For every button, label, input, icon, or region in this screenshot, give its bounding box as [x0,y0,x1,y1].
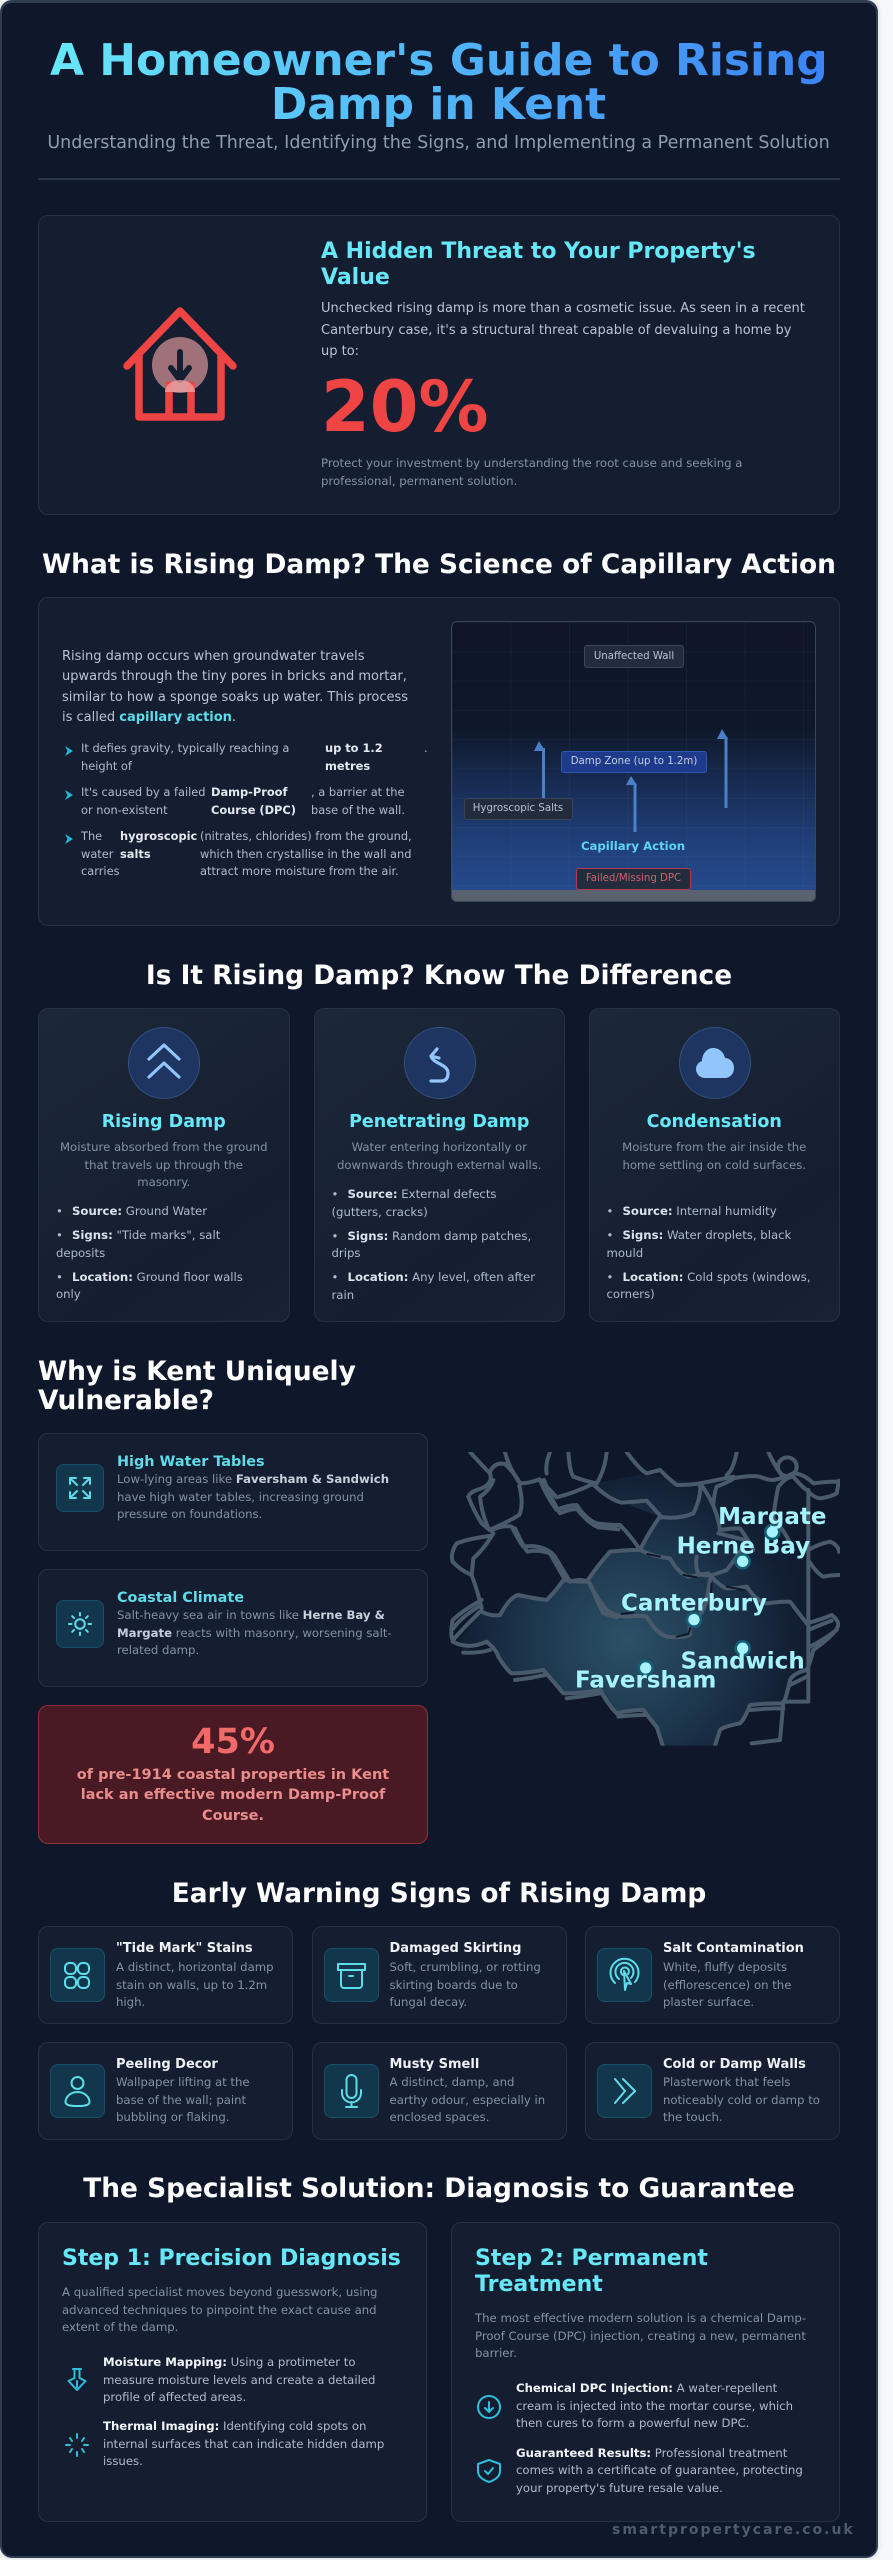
text: chemical DPC injection: Chemical DPC Injection: A water-repellent [516,2381,777,2395]
text: musty smell: earthy odour, especially in [390,2093,545,2107]
label: capillary action: Capillary Action [581,839,685,853]
text: protect investment: Protect your investment by understanding the root cause and seeking a [321,456,742,470]
text: high water tables: have high water tables, increasing ground [117,1490,364,1504]
panel: hidden threat [38,215,840,515]
text: high water tables [117,1472,389,1521]
heading: hidden threat [321,239,756,290]
text: thermal imaging: Thermal Imaging: Identifying cold spots on [103,2419,366,2433]
text: musty smell: enclosed spaces. [390,2110,489,2124]
text: coastal climate: Salt-heavy sea air in towns like Herne Bay & [117,1608,385,1622]
text: penetrating damp description: Water entering horizontally or [352,1140,527,1154]
list: condensation facts [606,1204,811,1301]
bullet: salts: water [81,847,113,861]
list: condensation facts: Location: Cold spots (windows, [622,1270,811,1284]
callout: 45% statistic [38,1705,428,1844]
heading: kent vulnerability: Why is Kent Uniquely [38,1356,356,1386]
heading: tide mark stains: "Tide Mark" Stains [116,1941,253,1956]
bullet: height: up to 1.2 [325,741,383,755]
bullet: failed DPC [65,785,405,817]
list: condensation facts: • [606,1228,613,1242]
text: moisture mapping: measure moisture levels and create a detailed [103,2373,375,2387]
text: peeling decor: Wallpaper lifting at the [116,2075,250,2089]
panel: coastal climate [38,1569,428,1687]
icon: tide mark [50,1948,105,2002]
icon: house with damp arrow [123,307,237,421]
heading: peeling decor: Peeling Decor [116,2056,218,2072]
stat: 20%: 20% [321,366,489,448]
text: moisture mapping: Moisture Mapping: Using a protimeter to [103,2355,355,2369]
bullet: salts: which then crystallise in the wall and [200,847,411,861]
text: rising damp description: Moisture absorbed from the ground [60,1140,268,1154]
marker: Margate: Margate [718,1504,827,1530]
text: step 2 intro: The most effective modern solution is a chemical Damp- [475,2311,806,2325]
icon: shield check [477,2459,501,2483]
text: tide mark stains [116,1960,274,2009]
heading: damaged skirting: Damaged Skirting [390,1941,521,1956]
list: penetrating damp facts: • [332,1270,338,1284]
panel: salt contamination [585,1926,840,2024]
icon: microphone [324,2064,378,2118]
arrows: capillary rise [534,729,728,832]
text: step 1 intro [62,2285,377,2334]
icon: cloud [678,1027,750,1099]
bullet: salts: carries [81,864,120,878]
text: tide mark stains: stain on walls, up to 1.2m [116,1978,267,1992]
bullet: salts: The [81,829,102,843]
text: chemical DPC injection: cream is injected into the mortar course, which [516,2399,793,2413]
panel: step 2 [451,2222,840,2522]
diagram: wall cross-section [451,621,816,902]
heading: step 2: Step 2: Permanent [475,2246,708,2271]
bullet: salts [65,829,412,878]
bullet: height: It defies gravity, typically reaching a [81,741,289,755]
heading: high water tables: High Water Tables [117,1454,265,1470]
list: penetrating damp facts: Location: Any level, often after [348,1270,535,1284]
text: guaranteed results [516,2446,803,2495]
text: chemical DPC injection: then cures to form a powerful new DPC. [516,2416,749,2430]
text: guaranteed results: Guaranteed Results: Professional treatment [516,2446,787,2460]
icon: chevrons up [128,1027,200,1099]
text: coastal climate [117,1608,392,1657]
list: condensation facts: • [606,1270,613,1284]
panel: peeling decor [38,2042,293,2140]
text: step 1 intro: advanced techniques to pinpoint the exact cause and [62,2303,377,2317]
bullet: failed DPC: base of the wall. [311,803,405,817]
heading: step 2: Treatment [475,2272,603,2297]
list: penetrating damp facts: Source: External defects [348,1187,496,1201]
list: rising damp facts: • [56,1204,63,1218]
text: high water tables: pressure on foundations. [117,1507,262,1521]
marker: Canterbury: Canterbury [621,1591,767,1617]
heading: step 2 [475,2246,708,2297]
heading: musty smell: Musty Smell [390,2056,479,2072]
text: DPC statistic: Course. [202,1808,264,1824]
heading: rising damp: Rising Damp [102,1112,226,1132]
title: Damp in Kent [271,78,606,130]
heading: hidden threat: A Hidden Threat to Your Property's [321,239,756,264]
label: failed DPC [576,868,691,890]
list: penetrating damp facts [332,1187,536,1302]
text: salt contamination: plaster surface. [663,1995,754,2009]
panel: tide mark stains [38,1926,293,2024]
bullet: height: height of [81,759,132,773]
text: DPC statistic: of pre-1914 coastal properties in Kent [77,1767,389,1783]
list: penetrating damp facts: drips [332,1246,360,1260]
bullet: height: . [424,741,428,755]
list: penetrating damp facts: (gutters, cracks) [332,1205,428,1219]
text: DPC statistic [77,1767,389,1824]
marker: Sandwich: Sandwich [681,1648,805,1674]
list: penetrating damp facts: • [332,1187,338,1201]
text: threat description: Canterbury case, it's a structural threat capable of devaluing a home by [321,322,791,338]
list: condensation facts: • [606,1204,613,1218]
heading: step 1: Step 1: Precision Diagnosis [62,2246,401,2271]
list: condensation facts: Source: Internal humidity [622,1204,777,1218]
list: rising damp facts: Location: Ground floor walls [72,1270,243,1284]
text: guaranteed results: your property's future resale value. [516,2481,723,2495]
icon: arrow down circle [477,2395,501,2419]
title: A Homeowner's Guide to Rising [50,34,828,86]
bullet: salts: salts [120,847,151,861]
list: penetrating damp facts: Signs: Random damp patches, [348,1229,531,1243]
text: protect investment [321,456,742,488]
panel: damaged skirting [312,1926,567,2024]
panel: cold or damp walls [585,2042,840,2140]
text: guaranteed results: comes with a certificate of guarantee, protecting [516,2463,803,2477]
text: moisture mapping [103,2355,375,2404]
text: threat description: up to: [321,344,359,359]
heading: early warning signs: Early Warning Signs of Rising Damp [172,1878,706,1909]
text: coastal climate: Margate reacts with masonry, worsening salt- [117,1626,392,1640]
list: rising damp facts: Signs: "Tide marks", salt [72,1228,220,1242]
icon: expand arrows [56,1464,104,1512]
footer: website: smartpropertycare.co.uk [612,2522,855,2538]
text: explanation: is called capillary action. [62,710,236,725]
text: damaged skirting: Soft, crumbling, or rotting [390,1960,541,1974]
panel: high water tables [38,1433,428,1551]
heading: coastal climate: Coastal Climate [117,1590,244,1606]
text: penetrating damp description: downwards through external walls. [337,1158,542,1172]
label: unaffected wall: Unaffected Wall [594,651,674,662]
list: condensation facts: Signs: Water droplets, black [622,1228,791,1242]
text: musty smell [390,2075,545,2124]
list: condensation facts: mould [606,1246,643,1260]
icon: double chevron [597,2064,652,2118]
bullet: failed DPC: Course (DPC) [211,803,296,817]
text: high water tables: Low-lying areas like Faversham & Sandwich [117,1472,389,1486]
list: rising damp facts: deposits [56,1246,105,1260]
panel: step 1 [38,2222,427,2522]
text: protect investment: professional, permanent solution. [321,474,517,488]
icon: corner arrow [404,1027,476,1099]
text: step 2 intro: barrier. [475,2346,517,2360]
panel: rising damp [38,1008,290,1322]
list: penetrating damp facts: rain [332,1288,354,1302]
subtitle: Understanding the Threat, Identifying the Signs, and Implementing a Permanent Solution [47,133,830,153]
heading: salt contamination: Salt Contamination [663,1941,804,1956]
bullet: height: metres [325,759,370,773]
label: unaffected wall [584,645,684,668]
label: damp zone: Damp Zone (up to 1.2m) [571,756,697,767]
panel: musty smell [312,2042,567,2140]
text: step 2 intro [475,2311,806,2360]
text: salt contamination [663,1960,791,2009]
text: salt contamination: White, fluffy deposits [663,1960,787,1974]
text: DPC statistic: lack an effective modern Damp-Proof [81,1787,385,1803]
heading: what is rising damp: What is Rising Damp? The Science of Capillary Action [42,549,836,580]
text: thermal imaging [103,2419,384,2468]
text: explanation [62,648,408,725]
text: cold or damp walls: noticeably cold or damp to [663,2093,820,2107]
icon: moisture probe [68,2368,86,2391]
label: failed DPC: Failed/Missing DPC [586,873,681,884]
text: explanation: upwards through the tiny pores in bricks and mortar, [62,669,407,684]
list: condensation facts: corners) [606,1287,655,1301]
heading: penetrating damp: Penetrating Damp [349,1112,529,1132]
text: condensation description: Moisture from the air inside the [622,1140,806,1154]
bullet: failed DPC: , a barrier at the [311,785,404,799]
text: peeling decor [116,2075,250,2124]
text: condensation description: home settling on cold surfaces. [622,1158,806,1172]
text: threat description [321,301,805,359]
text: musty smell: A distinct, damp, and [390,2075,514,2089]
text: salt contamination: (efflorescence) on the [663,1978,791,1992]
icon: touch rings [597,1948,652,2002]
list: rising damp facts [56,1204,243,1301]
text: coastal climate: related damp. [117,1643,199,1657]
text: explanation: similar to how a sponge soaks up water. This process [62,690,408,705]
stat: 45%: 45% [191,1722,275,1762]
text: cold or damp walls: Plasterwork that feels [663,2075,790,2089]
icon: archive box [324,1948,378,2002]
bullet: height [65,741,428,773]
heading: kent vulnerability: Vulnerable? [38,1384,214,1416]
icon: sun [56,1600,104,1648]
map: Kent towns [449,1452,840,1746]
heading: cold or damp walls: Cold or Damp Walls [663,2056,806,2072]
heading: know the difference: Is It Rising Damp? Know The Difference [146,960,732,991]
text: peeling decor: bubbling or flaking. [116,2110,229,2124]
text: damaged skirting [390,1960,541,2009]
heading: specialist solution: The Specialist Solution: Diagnosis to Guarantee [83,2173,795,2204]
list: rising damp facts: • [56,1270,63,1284]
text: thermal imaging: internal surfaces that can indicate hidden damp [103,2437,384,2451]
text: peeling decor: base of the wall; paint [116,2093,246,2107]
text: cold or damp walls: the touch. [663,2110,723,2124]
text: tide mark stains: A distinct, horizontal damp [116,1960,274,1974]
text: threat description: Unchecked rising damp is more than a cosmetic issue. As seen in a recent [321,301,805,316]
text: moisture mapping: profile of affected areas. [103,2390,246,2404]
panel: capillary action [38,597,840,926]
label: damp zone [561,751,707,773]
label: hygroscopic salts [464,798,572,820]
text: step 1 intro: extent of the damp. [62,2320,178,2334]
text: rising damp description: masonry. [137,1175,190,1189]
text: rising damp description: that travels up through the [84,1158,243,1172]
text: cold or damp walls [663,2075,820,2124]
list: penetrating damp facts: • [332,1229,338,1243]
bullet: failed DPC: Damp-Proof [211,785,287,799]
text: chemical DPC injection [516,2381,793,2430]
text: thermal imaging: issues. [103,2454,143,2468]
heading: kent vulnerability [38,1356,356,1416]
bullet: salts: (nitrates, chlorides) from the ground, [200,829,412,843]
text: rising damp description [60,1140,268,1189]
list: rising damp facts: • [56,1228,63,1242]
text: explanation: Rising damp occurs when groundwater travels [62,648,365,664]
bullet: failed DPC: It's caused by a failed [81,785,206,799]
text: penetrating damp description [337,1140,542,1172]
text: step 2 intro: Proof Course (DPC) injection, creating a new, permanent [475,2329,806,2343]
icon: person [50,2064,105,2118]
title [50,38,827,126]
text: damaged skirting: fungal decay. [390,1995,467,2009]
marker: Herne Bay: Herne Bay [677,1533,810,1559]
list: rising damp facts: only [56,1287,81,1301]
text: damaged skirting: skirting boards due to [390,1978,518,1992]
text: step 1 intro: A qualified specialist moves beyond guesswork, using [62,2285,377,2299]
list: rising damp facts: Source: Ground Water [72,1204,207,1218]
icon: thermal loader [65,2433,89,2457]
text: tide mark stains: high. [116,1995,145,2009]
panel: penetrating damp [314,1008,565,1322]
bullet: failed DPC: or non-existent [81,803,168,817]
heading: hidden threat: Value [321,265,390,290]
label: hygroscopic salts: Hygroscopic Salts [473,803,563,814]
panel: condensation [588,1008,840,1322]
text: condensation description [622,1140,806,1172]
heading: condensation: Condensation [647,1112,782,1132]
bullet: salts: hygroscopic [120,829,197,843]
bullet: salts: attract more moisture from the air. [200,864,399,878]
marker: Faversham: Faversham [575,1668,716,1694]
